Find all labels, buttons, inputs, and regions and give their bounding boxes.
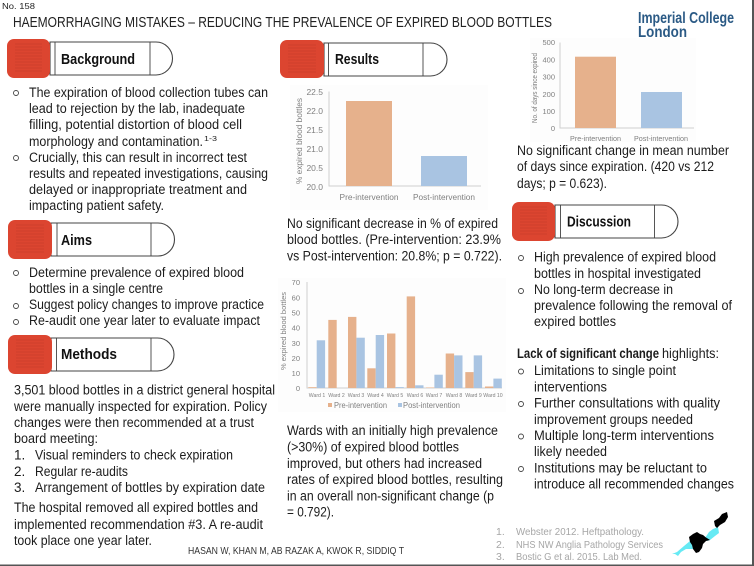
- background bullets: impacting patient safety.: [29, 198, 164, 213]
- methods text: 1.: [14, 448, 25, 462]
- chart legend: Post-intervention: [403, 401, 460, 410]
- results text 2: [287, 423, 503, 520]
- panel: background: [7, 39, 268, 213]
- results text 2: rates of expired blood bottles, resulting: [287, 472, 503, 487]
- days since expiration text: No significant change in mean number: [517, 143, 729, 158]
- bar chart: percent expired by ward: 30: [292, 339, 300, 348]
- results text 2: Wards with an initially high prevalence: [287, 423, 498, 438]
- authors: HASAN W, KHAN M, AB RAZAK A, KWOK R, SIDDIQ T: [188, 546, 404, 557]
- references: NHS NW Anglia Pathology Services: [516, 539, 663, 551]
- methods text: 3.: [14, 480, 25, 495]
- logo: Imperial College London: London: [638, 24, 687, 41]
- methods text: [13, 382, 275, 548]
- bar chart: percent expired by ward: 0: [296, 384, 300, 393]
- methods text: implemented recommendation #3. A re-audit: [14, 517, 263, 532]
- aims bullets: [14, 265, 264, 328]
- bar chart: percent expired by ward: Ward 6: [407, 393, 423, 399]
- methods text: Visual reminders to check expiration: [35, 448, 233, 462]
- bar chart: percent expired by ward: Ward 1: [309, 393, 325, 399]
- heading: methods tube: [8, 335, 174, 374]
- days since expiration text: of days since expiration. (420 vs 212: [517, 159, 714, 174]
- bar chart: percent expired by ward: Ward 10: [483, 393, 503, 399]
- panel: results: [278, 40, 506, 520]
- methods text: board meeting:: [14, 431, 98, 446]
- bar chart: percent expired by ward: Ward 5: [387, 393, 403, 399]
- aims bullets: bottles in a single centre: [29, 281, 163, 296]
- heading: results tube: Results: [335, 52, 379, 68]
- lack of significant change list: improvement groups needed: [534, 412, 693, 427]
- bar chart: percent expired by ward: % expired blood bottles: [279, 292, 288, 370]
- panel: methods: [8, 335, 275, 548]
- lack of significant change list: Lack of significant change: [517, 346, 659, 361]
- heading: background tube: Background: [61, 52, 135, 68]
- bar chart: days since expired: 100: [542, 107, 555, 116]
- bar chart: percent expired by ward: Ward 4: [367, 393, 384, 399]
- references: 3.: [496, 551, 505, 563]
- days since expiration text: [517, 143, 729, 191]
- heading: discussion tube: [512, 202, 678, 241]
- background bullets: 1-3: [204, 134, 217, 143]
- bar chart: days since expired: Post-intervention: [634, 136, 688, 143]
- lack of significant change list: [517, 346, 734, 492]
- discussion bullets: prevalence following the removal of: [534, 298, 732, 313]
- results text 2: improved, but others had increased: [287, 456, 482, 471]
- background bullets: morphology and contamination.: [29, 134, 203, 149]
- discussion bullets: No long-term decrease in: [534, 282, 673, 297]
- discussion bullets: expired bottles: [534, 314, 616, 329]
- chart legend: [328, 401, 460, 410]
- lack of significant change list: Institutions may be reluctant to: [534, 460, 707, 476]
- icon: regional map: [672, 512, 728, 556]
- methods text: 3,501 blood bottles in a district general hospital: [14, 382, 275, 398]
- methods text: Regular re-audits: [35, 464, 128, 479]
- lack of significant change list: interventions: [534, 380, 607, 394]
- results text 2: (>30%) of expired blood bottles: [287, 440, 459, 454]
- background bullets: lead to rejection by the lab, inadequate: [29, 101, 245, 116]
- bar chart: percent expired blood bottles: Pre-intervention: [340, 193, 398, 202]
- bar chart: percent expired blood bottles: 21.0: [306, 144, 323, 154]
- bar chart: percent expired by ward: 60: [292, 294, 300, 302]
- heading: results tube: [280, 40, 447, 78]
- bar chart: days since expired: 300: [542, 72, 555, 82]
- results text 1: [287, 216, 502, 264]
- references: 2.: [496, 539, 505, 551]
- results text 1: blood bottles. (Pre-intervention: 23.9%: [287, 232, 501, 247]
- bar chart: percent expired by ward: 70: [292, 278, 300, 287]
- bar chart: percent expired by ward: Ward 2: [328, 393, 345, 399]
- aims bullets: Re-audit one year later to evaluate impact: [29, 313, 260, 328]
- bar chart: percent expired blood bottles: 22.5: [306, 87, 323, 97]
- bar chart: percent expired blood bottles: 21.5: [306, 125, 323, 135]
- bar chart: days since expired: 200: [542, 90, 555, 99]
- background bullets: The expiration of blood collection tubes can: [29, 85, 268, 100]
- heading: background tube: [7, 39, 172, 78]
- logo: Imperial College London: [638, 10, 734, 41]
- background bullets: [14, 85, 268, 213]
- lack of significant change list: introduce all recommended changes: [534, 476, 734, 492]
- bar chart: days since expired: 500: [542, 38, 555, 47]
- bar chart: days since expired: [530, 38, 696, 143]
- references: Bostic G et al. 2015. Lab Med.: [516, 551, 642, 563]
- days since expiration text: days; p = 0.623).: [517, 176, 607, 191]
- bar chart: percent expired by ward: 40: [292, 324, 300, 332]
- results text 2: = 0.792).: [287, 504, 334, 520]
- methods text: 2.: [14, 464, 25, 479]
- heading: discussion tube: Discussion: [567, 214, 631, 230]
- bar chart: days since expired: 0: [551, 124, 555, 133]
- panel: discussion: [512, 202, 734, 492]
- references: 1.: [496, 526, 505, 538]
- lack of significant change list: highlights:: [662, 346, 719, 361]
- bar chart: percent expired blood bottles: Post-intervention: [413, 193, 475, 202]
- lack of significant change list: Limitations to single point: [534, 363, 676, 378]
- discussion bullets: bottles in hospital investigated: [534, 266, 701, 281]
- heading: aims tube: Aims: [61, 233, 92, 249]
- bar chart: percent expired by ward: Ward 7: [426, 393, 442, 399]
- bar chart: percent expired by ward: Ward 9: [465, 393, 482, 399]
- background bullets: filling, potential distortion of blood cell: [29, 117, 242, 132]
- lack of significant change list: Multiple long-term interventions: [534, 428, 714, 443]
- bar chart: percent expired by ward: Ward 3: [348, 393, 364, 399]
- aims bullets: Determine prevalence of expired blood: [29, 265, 244, 280]
- bar chart: percent expired blood bottles: 22.0: [306, 106, 323, 116]
- bar chart: days since expired: Pre-intervention: [570, 136, 621, 143]
- lack of significant change list: likely needed: [534, 444, 607, 459]
- chart legend: Pre-intervention: [334, 401, 387, 410]
- bar chart: percent expired blood bottles: [290, 85, 488, 210]
- bar chart: days since expired: 400: [542, 56, 555, 64]
- lack of significant change list: Further consultations with quality: [534, 396, 720, 410]
- title: HAEMORRHAGING MISTAKES – REDUCING THE PREVALENCE OF EXPIRED BLOOD BOTTLES: [13, 15, 552, 31]
- background bullets: Crucially, this can result in incorrect test: [29, 150, 247, 165]
- poster number: No. 158: [2, 1, 35, 11]
- bar chart: percent expired by ward: 20: [292, 354, 300, 363]
- methods text: Arrangement of bottles by expiration date: [35, 480, 265, 495]
- bar chart: percent expired by ward: Ward 8: [446, 393, 462, 399]
- bar chart: percent expired blood bottles: % expired blood bottles: [295, 98, 304, 184]
- heading: aims tube: [8, 220, 174, 259]
- references: Webster 2012. Heftpathology.: [516, 526, 644, 538]
- results text 1: vs Post-intervention: 20.8%; p = 0.722).: [287, 248, 502, 264]
- heading: methods tube: Methods: [61, 347, 117, 363]
- background bullets: results and repeated investigations, causing: [29, 166, 268, 181]
- bar chart: percent expired by ward: 10: [292, 369, 300, 378]
- results text 1: No significant decrease in % of expired: [287, 216, 498, 231]
- methods text: The hospital removed all expired bottles and: [14, 500, 258, 515]
- bar chart: percent expired blood bottles: 20.0: [306, 182, 323, 192]
- methods text: took place one year later.: [14, 533, 152, 548]
- results text 2: in an overall non-significant change (p: [287, 488, 494, 504]
- panel: aims: [8, 220, 264, 328]
- references: [496, 526, 663, 563]
- aims bullets: Suggest policy changes to improve practice: [29, 297, 264, 312]
- bar chart: days since expired: No. of days since expired: [530, 53, 539, 123]
- background bullets: delayed or inappropriate treatment and: [29, 182, 247, 197]
- bar chart: percent expired blood bottles: 20.5: [306, 163, 323, 173]
- bar chart: percent expired by ward: 50: [292, 308, 300, 318]
- discussion bullets: [518, 250, 732, 329]
- methods text: were manually inspected for expiration. Policy: [13, 399, 267, 414]
- discussion bullets: High prevalence of expired blood: [534, 250, 716, 264]
- bar chart: percent expired by ward: [278, 278, 506, 412]
- methods text: changes were then recommended at a trust: [14, 415, 254, 430]
